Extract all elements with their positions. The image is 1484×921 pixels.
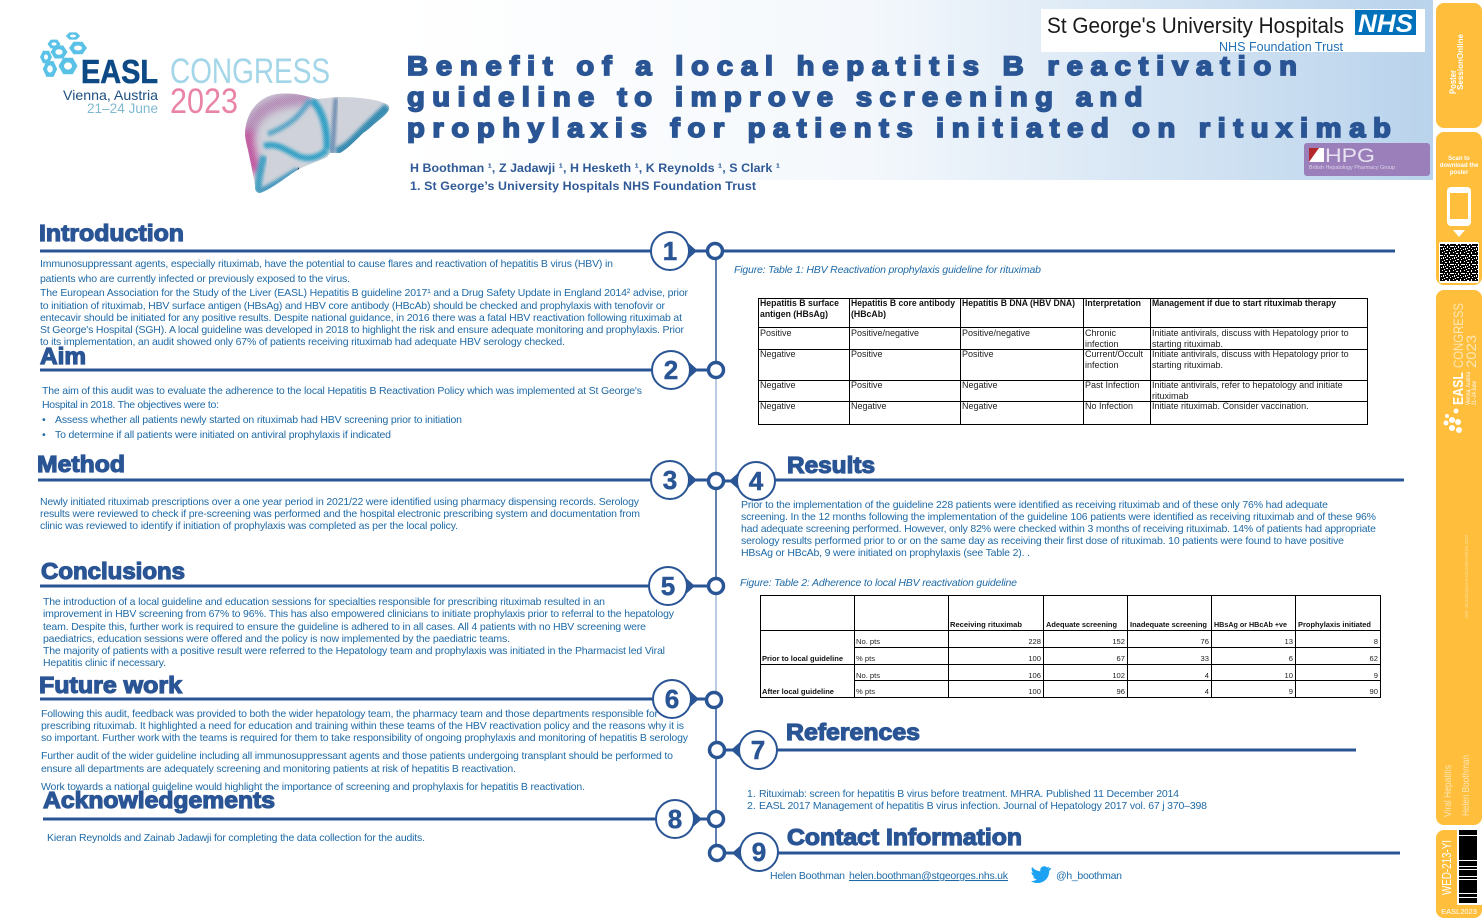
- table 1: HBV reactivation prophylaxis guideline: Positive: [962, 349, 994, 359]
- title: [407, 51, 1391, 143]
- heading: contact information: Contact Information: [787, 824, 1022, 850]
- contact details: [770, 870, 1122, 882]
- table 1: HBV reactivation prophylaxis guideline: Initiate antivirals, discuss with Hepatology prior to: [1152, 349, 1349, 359]
- table 2: adherence to local HBV reactivation guideline: After local guideline: [762, 687, 834, 696]
- logo: St George's University Hospitals NHS: St George's University Hospitals: [1047, 13, 1344, 38]
- heading: references: References: [786, 719, 920, 745]
- table 1: HBV reactivation prophylaxis guideline: Past Infection: [1085, 380, 1140, 390]
- conclusions text: [43, 596, 675, 669]
- table 2: adherence to local HBV reactivation guideline: 76: [1201, 637, 1209, 646]
- table 2: adherence to local HBV reactivation guideline: No. pts: [856, 637, 880, 646]
- future work text: Following this audit, feedback was provided to both the wider hepatology team, the pharmacy team and those departments responsible for: [41, 708, 658, 720]
- table 1: HBV reactivation prophylaxis guideline: antigen (HBsAg): [760, 309, 828, 319]
- table 2: adherence to local HBV reactivation guideline: 8: [1374, 637, 1378, 646]
- panel: aim: [40, 343, 642, 441]
- table 2: adherence to local HBV reactivation guideline: 33: [1201, 654, 1209, 663]
- timeline node 5: [40, 567, 724, 605]
- introduction text: [40, 258, 688, 348]
- table 1: HBV reactivation prophylaxis guideline: Positive: [760, 328, 792, 338]
- aim text: •: [42, 429, 46, 441]
- introduction text: Immunosuppressant agents, especially rituximab, have the potential to cause flares and reactivation of hepatitis B virus (HBV) in: [40, 258, 613, 270]
- table 2: adherence to local HBV reactivation guideline: 4: [1205, 687, 1209, 696]
- introduction text: to initiation of rituximab, HBV surface antigen (HBsAg) and HBV core antibody (HBcAb) should be checked and prophylaxis with tenofovir or: [40, 300, 666, 312]
- table 1: HBV reactivation prophylaxis guideline: Initiate antivirals, discuss with Hepatology prior to: [1152, 328, 1349, 338]
- table 2: adherence to local HBV reactivation guideline: 4: [1205, 671, 1209, 680]
- table 2: adherence to local HBV reactivation guideline: % pts: [856, 654, 875, 663]
- sidebar: EASL congress: Vienna, Austria: [1466, 371, 1472, 405]
- table 1: HBV reactivation prophylaxis guideline: Initiate rituximab. Consider vaccination.: [1152, 401, 1309, 411]
- table 1: HBV reactivation prophylaxis guideline: Negative: [760, 349, 796, 359]
- sidebar: EASL congress: 21–24 June: [1472, 381, 1478, 405]
- table 1: HBV reactivation prophylaxis guideline: infection: [1085, 339, 1119, 349]
- table 1: HBV reactivation prophylaxis guideline: starting rituximab.: [1152, 339, 1223, 349]
- heading: future work: Future work: [39, 672, 182, 698]
- icon: liver illustration: [245, 94, 390, 193]
- timeline node 4: [723, 462, 1404, 500]
- heading: conclusions: Conclusions: [41, 558, 185, 584]
- aim text: Hospital in 2018. The objectives were to:: [42, 399, 219, 411]
- timeline node 4: 4: [749, 466, 764, 496]
- future work text: Work towards a national guideline would highlight the importance of screening and prophylaxis for hepatitis B reactivation.: [41, 781, 585, 793]
- results text: HBsAg or HBcAb, 9 were initiated on prophylaxis (see Table 2). .: [741, 547, 1030, 559]
- results text: [741, 499, 1376, 559]
- introduction text: The European Association for the Study of the Liver (EASL) Hepatitis B guideline 2017¹ and a Drug Safety Update in England 2014² advise, prior: [40, 287, 688, 299]
- future work text: [41, 708, 689, 793]
- table 2: adherence to local HBV reactivation guideline: [760, 595, 1381, 698]
- timeline spine: [715, 251, 717, 853]
- table 1: HBV reactivation prophylaxis guideline: Positive: [851, 349, 883, 359]
- table 2: adherence to local HBV reactivation guideline: 152: [1112, 637, 1125, 646]
- table 2: adherence to local HBV reactivation guideline: HBsAg or HBcAb +ve: [1214, 620, 1287, 629]
- results text: Prior to the implementation of the guideline 228 patients were identified as receiving rituximab and of these only 76% had adequate: [741, 499, 1328, 511]
- table 2: adherence to local HBV reactivation guideline: 62: [1370, 654, 1378, 663]
- table 1: HBV reactivation prophylaxis guideline: (HBcAb): [851, 309, 886, 319]
- authors and affiliation: H Boothman ¹, Z Jadawji ¹, H Hesketh ¹, K Reynolds ¹, S Clark ¹: [410, 161, 780, 175]
- results text: screening. In the 12 months following the implementation of the guideline 106 patients were identified as receiving rituximab and of these 96%: [741, 511, 1376, 523]
- table 1: HBV reactivation prophylaxis guideline: Positive: [851, 380, 883, 390]
- sidebar: EASL congress: Viral Hepatitis: [1443, 765, 1454, 817]
- contact details: @h_boothman: [1056, 870, 1122, 882]
- conclusions text: Hepatitis clinic if necessary.: [43, 657, 166, 669]
- table 2: adherence to local HBV reactivation guideline: 67: [1117, 654, 1125, 663]
- title: Benefit of a local hepatitis B reactivation: [407, 51, 1297, 81]
- table 2: adherence to local HBV reactivation guideline: 106: [1028, 671, 1041, 680]
- title: prophylaxis for patients initiated on rituximab: [407, 113, 1391, 143]
- timeline node 2: [40, 351, 724, 389]
- panel: results: [741, 452, 1376, 559]
- aim text: •: [42, 414, 46, 426]
- header gradient band: [400, 0, 1433, 180]
- table 2: adherence to local HBV reactivation guideline: % pts: [856, 687, 875, 696]
- timeline node 2: 2: [664, 355, 678, 385]
- references list: Rituximab: screen for hepatitis B virus before treatment. MHRA. Published 11 December 2014: [759, 788, 1179, 800]
- table 1: HBV reactivation prophylaxis guideline: Hepatitis B core antibody: [851, 298, 955, 308]
- logo: British Hepatology Pharmacy Group: British Hepatology Pharmacy Group: [1309, 165, 1395, 171]
- figure caption: table 2: Figure: Table 2: Adherence to local HBV reactivation guideline: [740, 577, 1017, 589]
- method text: Newly initiated rituximab prescriptions over a one year period in 2021/22 were identified using pharmacy dispensing records. Serology: [40, 496, 640, 508]
- sidebar: EASL congress: 2023: [1463, 335, 1479, 368]
- introduction text: entecavir should be initiated for any positive results. Despite national guidance, in 2016 there was a fatal HBV reactivation following rituximab at: [40, 312, 682, 324]
- method text: clinic was reviewed to identify if initiation of prophylaxis was completed as per the local policy.: [40, 520, 458, 532]
- timeline node 6: 6: [665, 684, 679, 714]
- heading: acknowledgements: Acknowledgements: [43, 787, 275, 813]
- table 1: HBV reactivation prophylaxis guideline: Negative: [962, 401, 998, 411]
- table 2: adherence to local HBV reactivation guideline: 102: [1112, 671, 1125, 680]
- timeline node 3: [38, 461, 724, 499]
- table 1: HBV reactivation prophylaxis guideline: rituximab: [1152, 391, 1189, 401]
- heading: introduction: Introduction: [39, 220, 184, 246]
- introduction text: St George's Hospital (SGH). A local guideline was developed in 2018 to highlight the risk and ensure adequate monitoring and prophylaxis. Prior: [40, 324, 684, 336]
- table 1: HBV reactivation prophylaxis guideline: Current/Occult: [1085, 349, 1144, 359]
- table 2: adherence to local HBV reactivation guideline: 96: [1117, 687, 1125, 696]
- table 1: HBV reactivation prophylaxis guideline: Hepatitis B DNA (HBV DNA): [962, 298, 1075, 308]
- future work text: so important. Further work with the teams is required for them to take responsibility of ongoing prophylaxis and monitoring of hepatitis B serology: [41, 732, 689, 744]
- future work text: Further audit of the wider guideline including all immunosuppressant agents and those patients undergoing transplant should be performed to: [41, 750, 673, 762]
- conclusions text: The introduction of a local guideline and education sessions for specialties responsible for prescribing rituximab resulted in an: [43, 596, 605, 608]
- table 1: HBV reactivation prophylaxis guideline: Positive/negative: [851, 328, 919, 338]
- table 2: adherence to local HBV reactivation guideline: 100: [1028, 687, 1041, 696]
- logo: St George's University Hospitals NHS: NHS: [1358, 10, 1413, 38]
- aim text: [42, 385, 642, 441]
- panel: acknowledgements: [43, 787, 425, 844]
- panel: references: [747, 719, 1207, 812]
- aim text: The aim of this audit was to evaluate the adherence to the local Hepatitis B Reactivation Policy which was implemented at St George's: [42, 385, 642, 397]
- heading: aim: Aim: [40, 343, 86, 369]
- table 1: HBV reactivation prophylaxis guideline: No Infection: [1085, 401, 1133, 411]
- aim text: Assess whether all patients newly started on rituximab had HBV screening prior to initiation: [55, 414, 462, 426]
- logo: EASL Congress 2023: 21–24 June: [87, 100, 158, 116]
- logo: EASL Congress 2023: CONGRESS: [170, 52, 330, 91]
- authors and affiliation: 1. St George’s University Hospitals NHS Foundation Trust: [410, 179, 756, 193]
- table 1: HBV reactivation prophylaxis guideline: Negative: [962, 380, 998, 390]
- references list: 2.: [747, 800, 756, 812]
- table 1: HBV reactivation prophylaxis guideline: Interpretation: [1085, 298, 1141, 308]
- table 1: HBV reactivation prophylaxis guideline: Positive/negative: [962, 328, 1030, 338]
- table 1: HBV reactivation prophylaxis guideline: Hepatitis B surface: [760, 298, 839, 308]
- table 2: adherence to local HBV reactivation guideline: Inadequate screening: [1130, 620, 1207, 629]
- timeline node 7: 7: [751, 735, 765, 765]
- table 1: HBV reactivation prophylaxis guideline: infection: [1085, 360, 1119, 370]
- acknowledgements text: Kieran Reynolds and Zainab Jadawji for completing the data collection for the audits.: [47, 832, 425, 844]
- table 2: adherence to local HBV reactivation guideline: 100: [1028, 654, 1041, 663]
- authors and affiliation: [410, 161, 780, 193]
- timeline node 8: [43, 800, 724, 838]
- sidebar: EASL congress: Helen Boothman: [1461, 755, 1472, 816]
- sidebar: EASL congress: EASL: [1450, 372, 1467, 405]
- timeline node 9: 9: [752, 837, 766, 867]
- icon: twitter bird: [1031, 866, 1051, 883]
- table 2: adherence to local HBV reactivation guideline: Prior to local guideline: [762, 654, 843, 663]
- panel: method: [37, 451, 640, 532]
- aim text: To determine if all patients were initiated on antiviral prophylaxis if indicated: [55, 429, 391, 441]
- references list: [747, 788, 1207, 812]
- method text: results were reviewed to check if pre-screening was performed and the hospital electronic prescribing system and documentation from: [40, 508, 640, 520]
- conclusions text: team. Despite this, further work is required to ensure the guideline is adhered to in all cases. All 4 patients with no HBV screening were: [43, 621, 646, 633]
- timeline node 5: 5: [661, 571, 675, 601]
- contact details: helen.boothman@stgeorges.nhs.uk: [849, 870, 1009, 882]
- references list: EASL 2017 Management of hepatitis B virus infection. Journal of Hepatology 2017 vol. 67 j 370–398: [759, 800, 1207, 812]
- future work text: ensure all departments are adequately screening and monitoring patients at risk of hepatitis B reactivation.: [41, 763, 516, 775]
- panel: contact information: [770, 824, 1122, 883]
- sidebar: EASL congress: [1436, 290, 1482, 825]
- table 1: HBV reactivation prophylaxis guideline: Chronic: [1085, 328, 1117, 338]
- sidebar: EASL congress: CONGRESS: [1450, 303, 1466, 368]
- introduction text: to its implementation, an audit showed only 67% of patients receiving rituximab had adequate HBV serology checked.: [40, 336, 565, 348]
- contact details: Helen Boothman: [770, 870, 845, 882]
- table 1: HBV reactivation prophylaxis guideline: starting rituximab.: [1152, 360, 1223, 370]
- results text: serology results performed prior to or on the same day as receiving their first dose of rituximab. 10 patients were found to have positive: [741, 535, 1344, 547]
- logo: EASL Congress 2023: EASL: [81, 53, 158, 90]
- panel: conclusions: [41, 558, 675, 669]
- table 2: adherence to local HBV reactivation guideline: Prophylaxis initiated: [1298, 620, 1371, 629]
- conclusions text: The majority of patients with a positive result were referred to the Hepatology team and prophylaxis was initiated in the Pharmacist led Viral: [43, 645, 665, 657]
- logo: EASL Congress 2023: Vienna, Austria: [63, 87, 158, 103]
- sidebar: poster code and barcode: WED-213-YI: [1439, 840, 1454, 895]
- timeline node 7: [710, 731, 1356, 769]
- table 1: HBV reactivation prophylaxis guideline: [758, 298, 1368, 425]
- heading: method: Method: [37, 451, 125, 477]
- heading: results: Results: [787, 452, 875, 478]
- logo: St George's University Hospitals NHS: NHS Foundation Trust: [1219, 40, 1344, 54]
- table 2: adherence to local HBV reactivation guideline: Adequate screening: [1046, 620, 1117, 629]
- sidebar: scan to download: download the: [1440, 163, 1479, 169]
- table 1: HBV reactivation prophylaxis guideline: Management if due to start rituximab therapy: [1152, 298, 1336, 308]
- logo: British Hepatology Pharmacy Group: [1304, 143, 1430, 176]
- table 2: adherence to local HBV reactivation guideline: 6: [1289, 654, 1293, 663]
- table 1: HBV reactivation prophylaxis guideline: Negative: [760, 401, 796, 411]
- timeline node 3: 3: [663, 465, 677, 495]
- timeline node 1: [40, 232, 1395, 270]
- table 1: HBV reactivation prophylaxis guideline: Initiate antivirals, refer to hepatology and initiate: [1152, 380, 1343, 390]
- table 2: adherence to local HBV reactivation guideline: 9: [1374, 671, 1378, 680]
- table 2: adherence to local HBV reactivation guideline: 13: [1285, 637, 1293, 646]
- sidebar: poster session online: [1436, 3, 1482, 128]
- logo: EASL Congress 2023: 2023: [170, 82, 238, 121]
- conclusions text: improvement in HBV screening from 67% to 96%. This has also empowered clinicians to initiate prophylaxis prior to referral to the hepatology: [43, 608, 675, 620]
- logo: St George's University Hospitals NHS: [1041, 9, 1425, 54]
- sidebar: poster code and barcode: [1436, 830, 1482, 918]
- table 2: adherence to local HBV reactivation guideline: No. pts: [856, 671, 880, 680]
- table 2: adherence to local HBV reactivation guideline: 90: [1370, 687, 1378, 696]
- sidebar: poster code and barcode: EASL2023: [1441, 907, 1477, 916]
- logo: British Hepatology Pharmacy Group: HPG: [1325, 146, 1375, 167]
- table 1: HBV reactivation prophylaxis guideline: Negative: [760, 380, 796, 390]
- table 2: adherence to local HBV reactivation guideline: Receiving rituximab: [950, 620, 1022, 629]
- sidebar: EASL congress: DOI: 10.3252/pose.EASLCONGRESS.2023: [1464, 535, 1469, 618]
- title: guideline to improve screening and: [407, 82, 1142, 112]
- timeline node 1: 1: [663, 236, 677, 266]
- method text: [40, 496, 640, 532]
- sidebar: poster session online: Poster: [1448, 70, 1458, 94]
- panel: introduction: [39, 220, 688, 348]
- table 1: HBV reactivation prophylaxis guideline: Negative: [851, 401, 887, 411]
- conclusions text: paediatrics, education sessions were offered and the policy is now implemented by the paediatric teams.: [43, 633, 510, 645]
- sidebar: scan to download: [1436, 132, 1482, 285]
- timeline node 6: [40, 680, 722, 718]
- timeline node 9: [710, 833, 1400, 871]
- table 2: adherence to local HBV reactivation guideline: 228: [1028, 637, 1041, 646]
- introduction text: patients who are currently infected or previously exposed to the virus.: [40, 273, 350, 285]
- table 2: adherence to local HBV reactivation guideline: 9: [1289, 687, 1293, 696]
- sidebar: scan to download: poster: [1450, 170, 1469, 176]
- references list: 1.: [747, 788, 756, 800]
- table 2: adherence to local HBV reactivation guideline: 10: [1285, 671, 1293, 680]
- future work text: prescribing rituximab. It highlighted a need for education and training within these teams of the HBV reactivation policy and the reasons why it is: [41, 720, 684, 732]
- logo: EASL Congress 2023: [40, 32, 330, 121]
- sidebar: poster session online: SessionOnline: [1456, 33, 1465, 90]
- sidebar: scan to download: Scan to: [1448, 156, 1470, 162]
- results text: had adequate screening performed. However, only 82% were checked within 3 months of receiving rituximab. 14% of patients had appropriate: [741, 523, 1376, 535]
- figure caption: table 1: Figure: Table 1: HBV Reactivation prophylaxis guideline for rituximab: [734, 264, 1041, 276]
- panel: future work: [39, 672, 689, 793]
- timeline node 8: 8: [668, 804, 682, 834]
